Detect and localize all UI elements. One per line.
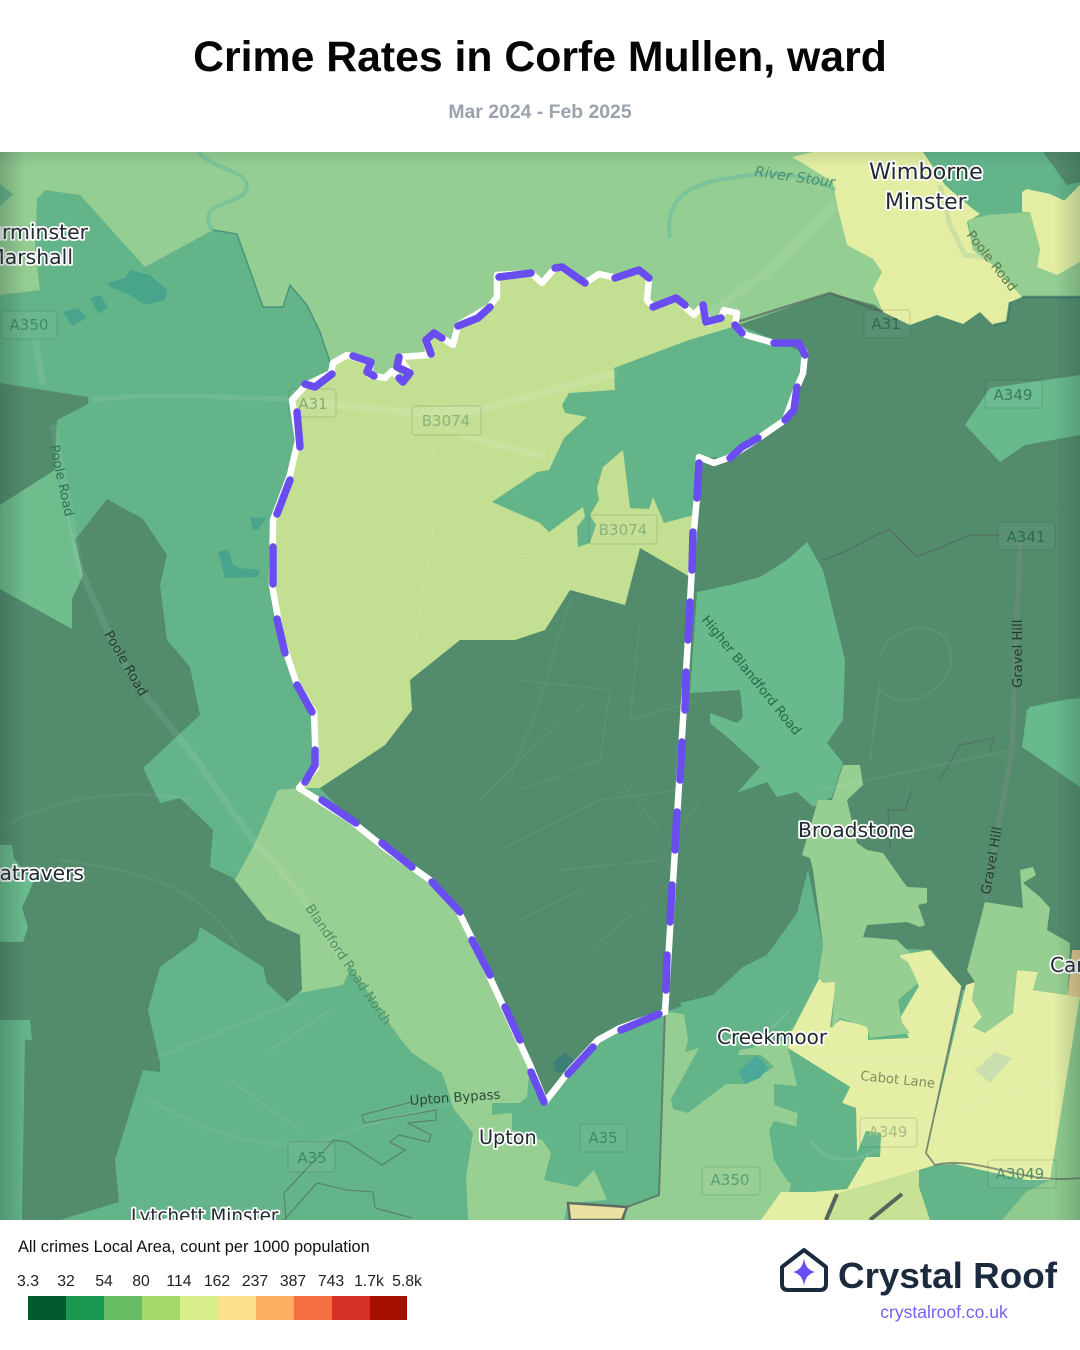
- place: Upton: Upton: [479, 1126, 537, 1149]
- website url: crystalroof.co.uk: [880, 1302, 1008, 1322]
- thick dark tracks south-east: [826, 1194, 902, 1220]
- area: east green patch: [1022, 698, 1080, 787]
- place: Sturminster Marshall: [0, 220, 89, 269]
- legend scale labels: 3.3: [17, 1273, 39, 1290]
- legend scale labels: 114: [166, 1273, 192, 1290]
- area: left edge lighter green: [0, 470, 83, 629]
- area: central pale yellow: [761, 950, 962, 1220]
- road: A341 Gravel Hill: [985, 540, 1020, 900]
- street: Upton Bypass: Upton Bypass: [409, 1088, 501, 1109]
- road label: A349 north: [985, 380, 1042, 408]
- road label: A341: [998, 522, 1055, 550]
- area: Broadstone light green: [802, 765, 927, 945]
- road label: A35 east: [580, 1124, 627, 1152]
- road label: A350 south: [702, 1167, 760, 1195]
- legend scale labels: 162: [204, 1273, 230, 1290]
- road label: A341: A341: [1007, 528, 1045, 546]
- area: Creekmoor mid green: [671, 870, 823, 1113]
- river: western bank line: [213, 230, 330, 362]
- area: sand patch: [1068, 950, 1080, 997]
- area: eastern pale yellow: [926, 970, 1080, 1180]
- street: Poole Road north-west: Poole Road: [46, 444, 76, 518]
- road label: A3049: [988, 1160, 1056, 1188]
- area: north-east light green: [968, 212, 1080, 297]
- area: far east light green: [1002, 997, 1080, 1220]
- road label: A31 west: A31: [298, 395, 328, 413]
- boundaries: dark district lines: [284, 293, 1080, 1220]
- area: Upton light green: [447, 1087, 607, 1220]
- road label: A350 west: A350: [10, 316, 48, 334]
- area: north-east mid green: [945, 152, 1080, 215]
- legend scale labels: 32: [57, 1273, 75, 1290]
- street: Poole Road west: Poole Road: [101, 628, 150, 699]
- street texture: [0, 185, 1070, 1159]
- road label: A35 west: A35: [297, 1149, 327, 1167]
- road label: A349 south: A349: [869, 1123, 907, 1141]
- legend scale labels: 5.8k: [392, 1273, 422, 1290]
- area: south east mid green: [919, 1164, 1026, 1220]
- street name labels: [46, 164, 1026, 1109]
- road label: A349 north: A349: [994, 386, 1032, 404]
- area: south central yellow-green: [826, 1170, 930, 1220]
- place: Broadstone: Broadstone: [798, 818, 914, 842]
- area: lower light green: [625, 1012, 800, 1220]
- road label: B3074 south: B3074: [599, 521, 647, 539]
- legend scale labels: 1.7k: [354, 1273, 384, 1290]
- logo wordmark: Crystal Roof: [838, 1255, 1058, 1296]
- place labels: [0, 159, 1080, 1227]
- map base: mid green areas: [0, 152, 1080, 1220]
- area: ward north yellow-green: [272, 267, 739, 788]
- area: eastern light green: [967, 867, 1070, 1033]
- place: Wimborne Minster: [869, 159, 983, 215]
- road label: A31 west: [289, 389, 336, 417]
- area: Creekmoor north light green: [818, 937, 918, 1038]
- street: Higher Blandford Road: Higher Blandford Road: [698, 613, 803, 738]
- logo: Crystal Roof: [780, 1248, 1058, 1322]
- area: Higher Blandford Road mid green: [690, 542, 845, 807]
- street: Cabot Lane: Cabot Lane: [860, 1069, 936, 1092]
- map edge vignette: [0, 152, 1080, 1220]
- legend scale labels: 54: [95, 1273, 113, 1290]
- road label: A35 west: [288, 1142, 335, 1172]
- icon: house with star: [782, 1250, 826, 1290]
- legend scale labels: 80: [132, 1273, 150, 1290]
- street: Poole Road Wimborne: Poole Road: [963, 228, 1019, 295]
- area: north-east dark corner: [1043, 152, 1080, 185]
- place: Creekmoor: Creekmoor: [717, 1025, 828, 1049]
- subtitle: date range: Mar 2024 - Feb 2025: [448, 101, 632, 123]
- legend colour ramp: [28, 1296, 407, 1320]
- legend scale labels: 743: [318, 1273, 344, 1290]
- road label: A3049: A3049: [996, 1165, 1044, 1183]
- area: A349 green patch: [965, 375, 1080, 462]
- road label: A35 east: A35: [588, 1129, 618, 1147]
- legend scale labels: [17, 1273, 422, 1290]
- place: Wimborne Minster: Minster: [885, 190, 968, 215]
- area: top-left mid green sliver: [0, 184, 13, 206]
- street: Gravel Hill north: Gravel Hill: [1011, 620, 1026, 688]
- area: south-west pale green: [235, 788, 530, 1100]
- water: lakes west: [63, 270, 266, 578]
- road label: B3074 south: [589, 515, 657, 544]
- choropleth map: [0, 152, 1080, 1220]
- area: bottom yellow block: [568, 1203, 627, 1220]
- road labels: [2, 310, 1056, 1195]
- legend: [17, 1238, 422, 1320]
- road label: A31 east: [864, 310, 910, 338]
- area: dark green central and east: [320, 293, 1080, 1102]
- area: dark green west: [0, 499, 302, 1220]
- river label: River Stour: River Stour: [753, 164, 837, 191]
- water: Creekmoor ponds: [738, 1055, 768, 1084]
- title: Crime Rates in Corfe Mullen, ward: [193, 33, 887, 81]
- water: pale pond east: [975, 1052, 1012, 1083]
- road label: A350 west: [2, 311, 57, 339]
- place: Wimborne Minster: Wimborne: [869, 159, 983, 185]
- area: dark green north-west wedge: [0, 383, 88, 505]
- legend title: All crimes Local Area, count per 1000 population: [18, 1238, 370, 1256]
- area: Wimborne Minster yellow: [792, 152, 1022, 325]
- legend scale labels: 387: [280, 1273, 306, 1290]
- area: north-east pale yellow: [1022, 185, 1080, 275]
- road label: B3074 north: [412, 406, 481, 435]
- area: Creekmoor south mid green: [769, 1048, 881, 1192]
- ward boundary: Corfe Mullen: [272, 267, 805, 1102]
- road label: B3074 north: B3074: [422, 412, 470, 430]
- street: Gravel Hill south: Gravel Hill: [979, 826, 1006, 896]
- area: Matravers mid green: [0, 845, 33, 942]
- area: northern light green: [0, 152, 883, 400]
- road label: A31 east: A31: [871, 315, 901, 333]
- road label: A350 south: A350: [711, 1171, 749, 1189]
- legend scale labels: 237: [242, 1273, 268, 1290]
- road label: A349 south: [860, 1118, 917, 1147]
- water: small pond central: [553, 1052, 574, 1072]
- street: Blandford Road North: Blandford Road North: [302, 902, 394, 1028]
- river: Stour: [198, 152, 835, 238]
